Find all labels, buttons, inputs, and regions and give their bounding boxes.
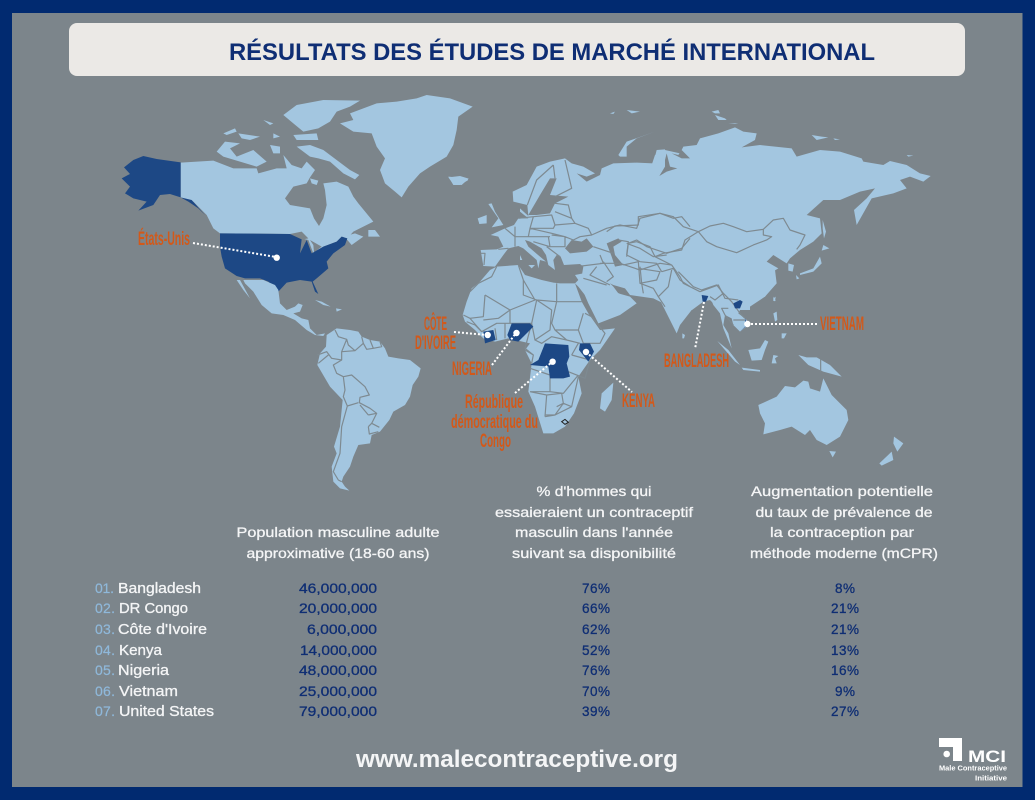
column headers: méthode moderne (mCPR) <box>750 545 938 561</box>
map: Central and South America <box>237 280 421 491</box>
row: Bangladesh: 8% <box>835 581 855 596</box>
column headers: la contraception par <box>770 524 914 540</box>
map: Africa <box>463 265 637 433</box>
map: Russia and northern Asia <box>610 110 931 310</box>
map: Vietnam <box>733 300 747 332</box>
row: United States <box>95 703 859 720</box>
row: Bangladesh: Bangladesh <box>118 581 201 597</box>
map labels: NIGERIA <box>452 359 492 380</box>
row: Vietnam: Vietnam <box>119 684 178 700</box>
map: Alaska <box>122 156 205 215</box>
column headers: masculin dans l'année <box>515 524 673 540</box>
row: Bangladesh <box>95 580 855 597</box>
title banner <box>69 23 965 76</box>
row: Nigeria: 48,000,000 <box>299 663 377 678</box>
map labels: D'IVOIRE <box>415 333 456 354</box>
map: contiguous United States <box>220 233 347 294</box>
map: Côte d'Ivoire <box>483 330 496 343</box>
row: United States: 79,000,000 <box>299 704 377 719</box>
column headers <box>236 483 938 561</box>
row: Nigeria: 05. <box>95 662 115 678</box>
website footer: www.malecontraceptive.org <box>355 746 678 773</box>
logo: Male Contraceptive Initiative: MCI <box>968 747 1006 766</box>
row: Kenya: Kenya <box>119 643 163 659</box>
row: Bangladesh: 01. <box>95 580 114 596</box>
world map <box>122 95 931 491</box>
row: Côte d'Ivoire: 03. <box>95 621 115 637</box>
title banner: RÉSULTATS DES ÉTUDES DE MARCHÉ INTERNATIONAL <box>229 38 875 66</box>
map: Australia <box>758 378 848 445</box>
column headers: approximative (18-60 ans) <box>246 545 430 561</box>
map: Kenya <box>579 343 594 362</box>
leader lines and location dots <box>193 243 817 393</box>
logo: Male Contraceptive Initiative: Initiative <box>975 776 1007 782</box>
row: Vietnam <box>95 683 855 700</box>
column headers: Population masculine adulte <box>236 524 440 540</box>
row: Nigeria: 16% <box>831 663 859 678</box>
map labels: Congo <box>480 431 511 452</box>
map: DR Congo <box>530 343 570 378</box>
map: highlighted countries <box>483 323 594 424</box>
map labels: démocratique du <box>451 412 538 433</box>
row: DR Congo: DR Congo <box>119 601 188 617</box>
column headers: suivant sa disponibilité <box>512 545 676 561</box>
row: Kenya: 04. <box>95 642 115 658</box>
row: Côte d'Ivoire: 6,000,000 <box>307 622 377 637</box>
map labels: VIETNAM <box>820 314 864 335</box>
row: DR Congo <box>95 600 859 617</box>
column headers: Augmentation potentielle <box>751 483 933 499</box>
row: Côte d'Ivoire: Côte d'Ivoire <box>118 622 207 638</box>
row: Côte d'Ivoire <box>95 621 859 638</box>
row: United States: 07. <box>95 703 115 719</box>
row: Vietnam: 9% <box>835 684 855 699</box>
map labels <box>138 228 864 452</box>
column headers: % d'hommes qui <box>536 483 652 499</box>
map: country borders <box>463 160 821 417</box>
map labels: CÔTE <box>424 313 447 335</box>
map labels: États-Unis <box>138 228 190 250</box>
map: Bangladesh <box>702 295 708 302</box>
row: Nigeria: Nigeria <box>118 663 170 679</box>
row: DR Congo: 66% <box>582 601 610 616</box>
map: North America and Greenland <box>122 95 473 294</box>
map: inland seas <box>528 178 623 267</box>
row: DR Congo: 02. <box>95 600 115 616</box>
row: Bangladesh: 76% <box>582 581 610 596</box>
logo: Male Contraceptive Initiative <box>939 738 1007 782</box>
map: Europe and Middle East <box>448 149 690 310</box>
row: United States: 39% <box>582 704 610 719</box>
row: Vietnam: 06. <box>95 683 115 699</box>
row: United States: United States <box>119 704 214 720</box>
map labels: KENYA <box>622 391 655 412</box>
row: Kenya: 52% <box>582 643 610 658</box>
data table <box>95 580 859 720</box>
map: Lesotho outline <box>562 419 568 424</box>
map labels: BANGLADESH <box>664 351 729 372</box>
row: Vietnam: 70% <box>582 684 610 699</box>
column headers: du taux de prévalence de <box>756 504 933 520</box>
row: Nigeria <box>95 662 859 679</box>
map labels: République <box>465 392 523 413</box>
column headers: essaieraient un contraceptif <box>495 504 693 520</box>
row: DR Congo: 20,000,000 <box>299 601 377 616</box>
map: Nigeria <box>507 323 533 342</box>
map: South and South-East Asia, Oceania <box>660 270 903 466</box>
row: Kenya <box>95 642 859 659</box>
row: United States: 27% <box>831 704 859 719</box>
row: Nigeria: 76% <box>582 663 610 678</box>
row: Bangladesh: 46,000,000 <box>299 581 377 596</box>
row: Côte d'Ivoire: 62% <box>582 622 610 637</box>
row: DR Congo: 21% <box>831 601 859 616</box>
row: Kenya: 14,000,000 <box>300 643 377 658</box>
row: Côte d'Ivoire: 21% <box>831 622 859 637</box>
logo: Male Contraceptive Initiative: Male Contraceptive <box>939 766 1007 772</box>
row: Kenya: 13% <box>831 643 859 658</box>
row: Vietnam: 25,000,000 <box>299 684 377 699</box>
